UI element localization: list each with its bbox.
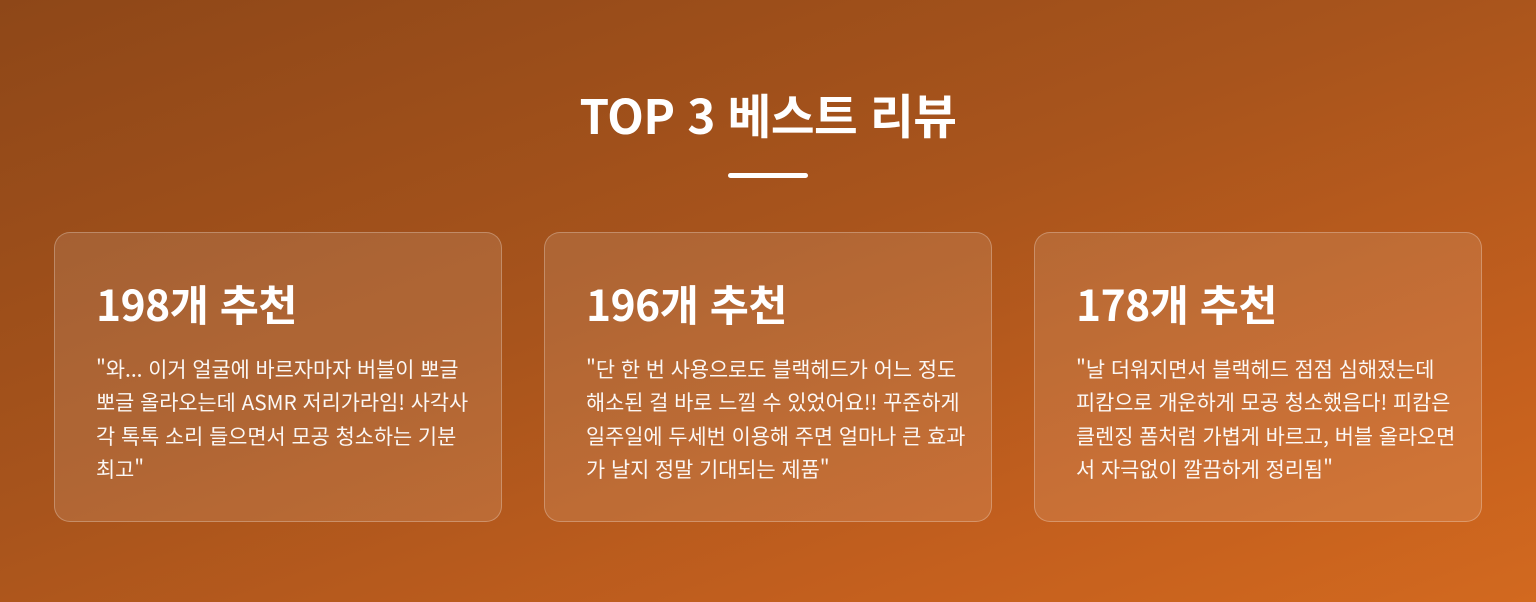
heading: 196 recommendations: 196개 추천 bbox=[586, 273, 787, 334]
text: review 1 quote: 각 톡톡 소리 들으면서 모공 청소하는 기분 bbox=[96, 420, 456, 450]
heading: 178 recommendations: 178개 추천 bbox=[1076, 273, 1277, 334]
panel: review 1 bbox=[54, 232, 502, 522]
title underline bbox=[728, 173, 808, 178]
text: review 3 quote: 피캄으로 개운하게 모공 청소했음다! 피캄은 bbox=[1076, 386, 1450, 416]
panel: review 2 bbox=[544, 232, 992, 522]
heading: 198 recommendations: 198개 추천 bbox=[96, 273, 297, 334]
text: review 2 quote: 일주일에 두세번 이용해 주면 얼마나 큰 효과 bbox=[586, 420, 965, 450]
text: review 1 quote: "와... 이거 얼굴에 바르자마자 버블이 뽀글 bbox=[96, 353, 459, 383]
text: review 1 quote: 최고" bbox=[96, 453, 144, 483]
text: review 3 quote: 클렌징 폼처럼 가볍게 바르고, 버블 올라오면 bbox=[1076, 420, 1455, 450]
text: review 1 quote: 뽀글 올라오는데 ASMR 저리가라임! 사각사 bbox=[96, 386, 468, 416]
text: review 2 quote: "단 한 번 사용으로도 블랙헤드가 어느 정도 bbox=[586, 353, 956, 383]
title: TOP 3 베스트 리뷰 bbox=[580, 79, 956, 148]
text: review 2 quote bbox=[586, 353, 965, 483]
text: review 3 quote: 서 자극없이 깔끔하게 정리됨" bbox=[1076, 453, 1333, 483]
panel: review 3 bbox=[1034, 232, 1482, 522]
text: review 1 quote bbox=[96, 353, 468, 483]
text: review 2 quote: 가 날지 정말 기대되는 제품" bbox=[586, 453, 830, 483]
text: review 3 quote bbox=[1076, 353, 1455, 483]
text: review 2 quote: 해소된 걸 바로 느낄 수 있었어요!! 꾸준하게 bbox=[586, 386, 960, 416]
text: review 3 quote: "날 더워지면서 블랙헤드 점점 심해졌는데 bbox=[1076, 353, 1434, 383]
